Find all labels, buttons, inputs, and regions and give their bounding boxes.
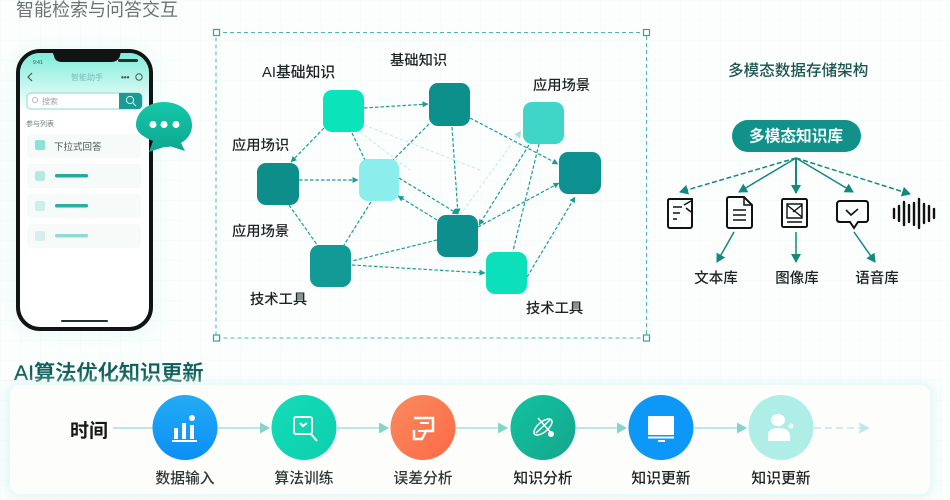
step: algorithm training: 算法训练 bbox=[274, 469, 334, 487]
graph labels: 基础知识 bbox=[390, 52, 447, 69]
step: error analysis: 误差分析 bbox=[393, 470, 453, 487]
step: error analysis bbox=[390, 395, 456, 487]
list heading: 参与列表 bbox=[26, 119, 54, 128]
icon: chat bubble bbox=[136, 102, 192, 152]
panel: phone mockup: 智能助手 bbox=[71, 72, 103, 82]
panel: timeline bbox=[6, 383, 934, 497]
step: data input bbox=[152, 395, 218, 487]
list rows: 下拉式回答 bbox=[54, 141, 102, 153]
panel: phone mockup: 9:41 bbox=[33, 60, 43, 66]
arrows bbox=[680, 158, 910, 262]
storage labels bbox=[694, 269, 899, 287]
icon: speech check bbox=[837, 201, 868, 228]
step: knowledge update 2: 知识更新 bbox=[751, 470, 811, 487]
step: knowledge update 2 bbox=[748, 395, 814, 487]
panel: knowledge graph bbox=[214, 30, 650, 341]
step: knowledge update: 知识更新 bbox=[631, 470, 691, 487]
search bar bbox=[27, 93, 142, 109]
graph labels: 应用场景 bbox=[533, 76, 590, 94]
step: data input: 数据输入 bbox=[155, 470, 215, 487]
heading: AI algorithm: AI算法优化知识更新 bbox=[14, 361, 204, 385]
panel: multimodal architecture bbox=[668, 120, 934, 287]
timeline connectors bbox=[113, 422, 870, 434]
step: algorithm training bbox=[272, 395, 336, 487]
panel: phone mockup bbox=[14, 50, 155, 332]
search bar: 搜索 bbox=[42, 96, 58, 106]
icon: note bbox=[668, 199, 692, 228]
pill: multimodal knowledge base: 多模态知识库 bbox=[749, 126, 843, 146]
graph labels: AI基础知识 bbox=[262, 64, 335, 81]
storage labels: 图像库 bbox=[775, 270, 819, 287]
icon: waveform bbox=[894, 199, 934, 228]
time label: 时间 bbox=[70, 420, 108, 442]
icon: image bbox=[782, 199, 807, 227]
pill: multimodal knowledge base bbox=[732, 120, 861, 152]
graph labels: 应用场识 bbox=[232, 136, 289, 154]
title: retrieval and Q&A: 智能检索与问答交互 bbox=[16, 0, 178, 20]
graph labels: 应用场景 bbox=[232, 222, 289, 240]
heading: multimodal storage: 多模态数据存储架构 bbox=[728, 62, 868, 80]
graph labels: 技术工具 bbox=[250, 291, 307, 308]
panel: phone mockup: ••• bbox=[121, 73, 130, 82]
graph labels: 技术工具 bbox=[526, 300, 583, 317]
storage labels: 语音库 bbox=[855, 270, 899, 287]
graph labels bbox=[232, 52, 590, 317]
icon: document bbox=[727, 197, 752, 228]
step: knowledge analysis bbox=[510, 395, 576, 487]
step: knowledge analysis: 知识分析 bbox=[513, 470, 573, 487]
storage labels: 文本库 bbox=[694, 269, 738, 287]
step: knowledge update bbox=[628, 395, 694, 487]
graph edges bbox=[289, 104, 575, 277]
list rows bbox=[27, 134, 141, 248]
graph nodes bbox=[257, 83, 601, 294]
